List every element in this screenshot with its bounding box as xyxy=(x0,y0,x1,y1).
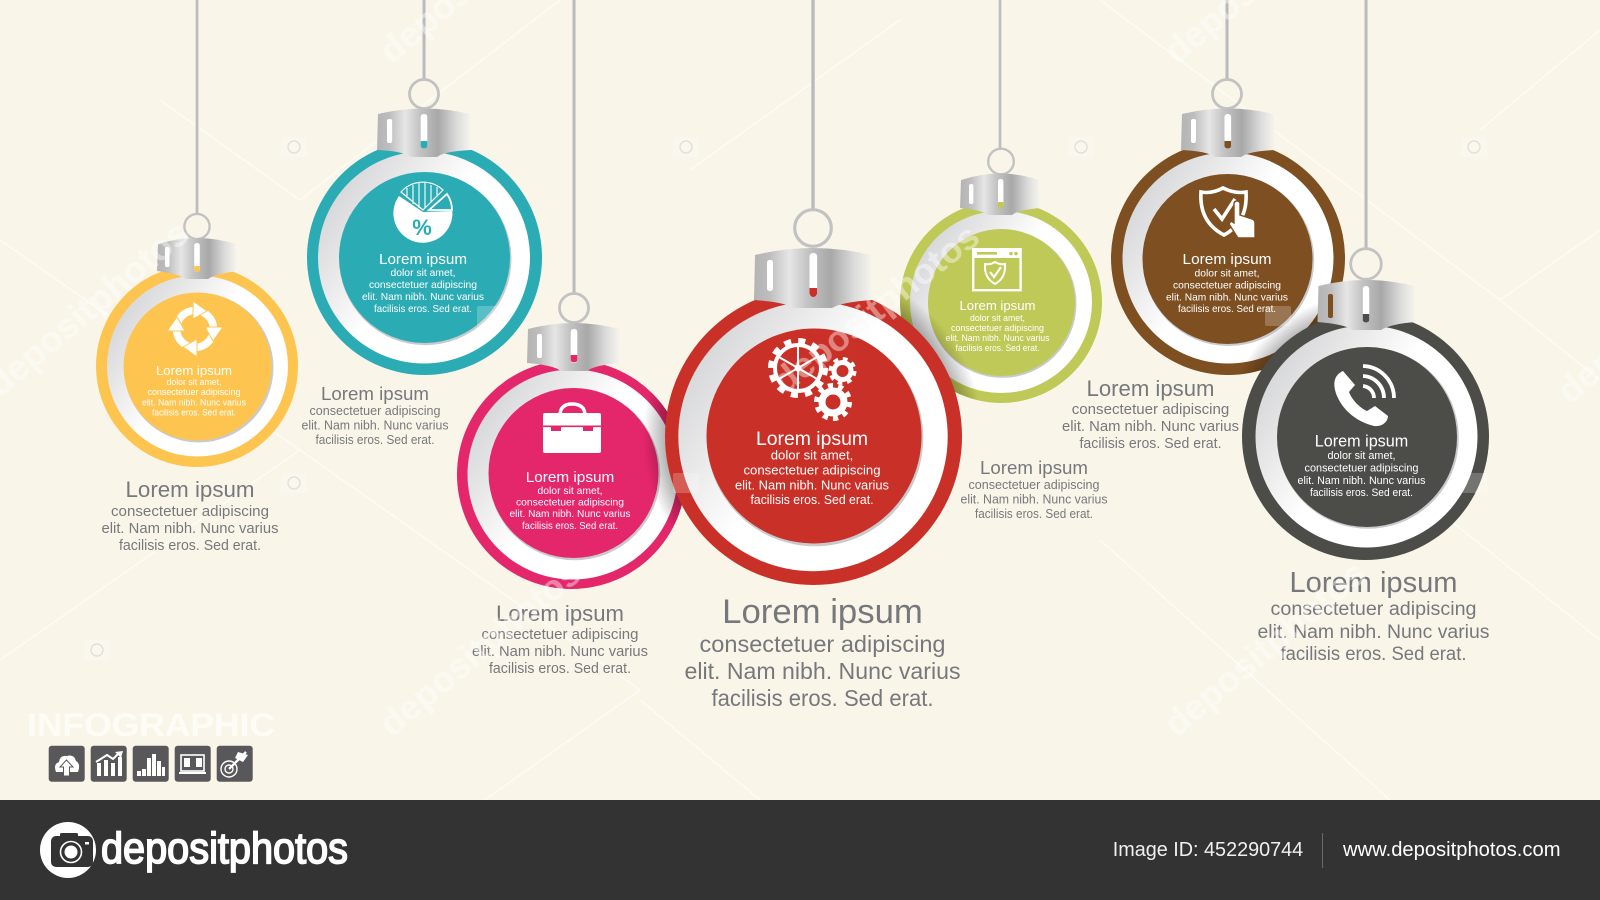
icon: cloud upload xyxy=(49,746,85,782)
caption: pink: facilisis eros. Sed erat. xyxy=(489,660,631,677)
caption: brown: elit. Nam nibh. Nunc varius xyxy=(1062,418,1239,435)
caption: pink: elit. Nam nibh. Nunc varius xyxy=(472,643,648,660)
text: dark inner label: Lorem ipsum xyxy=(1315,432,1408,450)
caption: yellow: Lorem ipsum xyxy=(126,477,254,502)
text: teal inner label xyxy=(362,251,484,315)
text: pink inner label xyxy=(510,469,630,532)
caption: brown: Lorem ipsum xyxy=(1086,376,1214,401)
caption: yellow: facilisis eros. Sed erat. xyxy=(119,537,261,554)
caption: red: consectetuer adipiscing xyxy=(700,631,946,657)
text: dark inner label xyxy=(1298,432,1426,499)
caption: brown: facilisis eros. Sed erat. xyxy=(1080,435,1222,452)
text: dark inner label: facilisis eros. Sed erat. xyxy=(1310,487,1413,499)
icon: gears xyxy=(771,341,854,418)
caption: red: facilisis eros. Sed erat. xyxy=(712,685,934,711)
icon: pie chart with percent xyxy=(393,182,452,243)
caption: pink: Lorem ipsum xyxy=(496,601,624,626)
icon: laptop xyxy=(175,746,211,782)
text: red inner label: facilisis eros. Sed erat. xyxy=(750,492,874,507)
caption: teal: elit. Nam nibh. Nunc varius xyxy=(302,418,448,432)
caption: dark grey xyxy=(1258,567,1490,665)
caption: green: Lorem ipsum xyxy=(980,457,1088,478)
text: green inner label: facilisis eros. Sed erat. xyxy=(956,343,1040,353)
caption: green: consectetuer adipiscing xyxy=(968,478,1100,492)
caption: dark grey: Lorem ipsum xyxy=(1290,567,1458,599)
icon: target with arrow xyxy=(217,746,253,782)
icon: growth chart xyxy=(91,746,127,782)
heading: INFOGRAPHIC: INFOGRAPHIC xyxy=(27,707,275,743)
caption: green: elit. Nam nibh. Nunc varius xyxy=(960,492,1108,506)
caption: teal: consectetuer adipiscing xyxy=(310,404,440,418)
icon: camera logo xyxy=(40,822,96,878)
text: teal inner label: Lorem ipsum xyxy=(379,251,467,268)
text: teal inner label: elit. Nam nibh. Nunc varius xyxy=(362,292,484,303)
caption: yellow: consectetuer adipiscing xyxy=(111,503,269,520)
text: brown inner label: Lorem ipsum xyxy=(1182,251,1272,268)
text: brown inner label: elit. Nam nibh. Nunc varius xyxy=(1166,292,1288,304)
caption: pink xyxy=(472,601,648,677)
icon: toolbox xyxy=(543,404,601,453)
text: red inner label: Lorem ipsum xyxy=(756,428,868,450)
text: pink inner label: dolor sit amet, xyxy=(538,486,602,497)
text: red inner label: consectetuer adipiscing xyxy=(744,462,880,478)
text: dark inner label: consectetuer adipiscing xyxy=(1304,462,1418,474)
text: teal inner label: facilisis eros. Sed erat. xyxy=(374,304,472,315)
text: yellow inner label: dolor sit amet, xyxy=(166,377,222,387)
text: yellow inner label: elit. Nam nibh. Nunc varius xyxy=(142,398,247,408)
text: green inner label: Lorem ipsum xyxy=(960,298,1036,313)
icon row xyxy=(49,746,253,782)
logo wordmark: depositphotos xyxy=(101,824,348,873)
text: brown inner label: facilisis eros. Sed erat. xyxy=(1178,304,1276,315)
caption: yellow xyxy=(102,477,278,554)
text: teal inner label: dolor sit amet, xyxy=(390,268,456,279)
website: www.depositphotos.com xyxy=(1342,839,1560,861)
caption: teal xyxy=(302,383,448,447)
icon: browser window with shield xyxy=(973,249,1021,290)
icon: circular arrows xyxy=(167,301,223,357)
caption: dark grey: consectetuer adipiscing xyxy=(1270,598,1476,620)
caption: dark grey: facilisis eros. Sed erat. xyxy=(1280,643,1466,665)
icon: telephone with signal xyxy=(1334,366,1394,426)
text: brown inner label: consectetuer adipiscing xyxy=(1173,280,1281,292)
text: yellow inner label: facilisis eros. Sed erat. xyxy=(152,408,236,418)
caption: green: facilisis eros. Sed erat. xyxy=(975,507,1093,521)
text: yellow inner label xyxy=(142,363,247,418)
caption: brown: consectetuer adipiscing xyxy=(1072,401,1229,418)
ornament: pink xyxy=(457,0,682,589)
text: yellow inner label: Lorem ipsum xyxy=(156,363,232,378)
ornament: brown xyxy=(1111,0,1345,375)
caption: green xyxy=(960,457,1108,521)
icon: bar chart xyxy=(133,746,169,782)
ornament: green xyxy=(900,0,1102,403)
caption: teal: facilisis eros. Sed erat. xyxy=(316,433,434,447)
caption: yellow: elit. Nam nibh. Nunc varius xyxy=(102,520,278,537)
ornament: dark grey xyxy=(1242,0,1489,560)
caption: red xyxy=(684,593,960,711)
text: green inner label: dolor sit amet, xyxy=(970,313,1025,323)
caption: dark grey: elit. Nam nibh. Nunc varius xyxy=(1258,621,1490,643)
text: brown inner label xyxy=(1166,251,1288,315)
text: pink inner label: Lorem ipsum xyxy=(526,469,614,486)
caption: red: Lorem ipsum xyxy=(722,593,923,631)
caption: brown xyxy=(1062,376,1239,452)
text: dark inner label: elit. Nam nibh. Nunc varius xyxy=(1298,475,1426,487)
caption: teal: Lorem ipsum xyxy=(321,383,429,404)
text: teal inner label: consectetuer adipiscing xyxy=(369,280,477,291)
watermark: depositphotos xyxy=(1156,552,1374,744)
text: dark inner label: dolor sit amet, xyxy=(1328,450,1396,462)
text: pink inner label: elit. Nam nibh. Nunc varius xyxy=(510,509,630,520)
ornament: teal xyxy=(307,0,542,375)
watermark: depositphotos xyxy=(765,215,987,401)
text: green inner label xyxy=(946,298,1050,353)
watermark: depositphotos xyxy=(371,552,589,744)
text: red inner label: elit. Nam nibh. Nunc varius xyxy=(735,478,889,492)
ornament: yellow xyxy=(96,0,298,467)
text: pink inner label: facilisis eros. Sed erat. xyxy=(522,521,618,532)
text: brown inner label: dolor sit amet, xyxy=(1194,268,1260,280)
icon: shield with hand xyxy=(1201,188,1255,238)
footer bar xyxy=(0,800,1600,900)
caption: pink: consectetuer adipiscing xyxy=(482,626,638,643)
text: red inner label: dolor sit amet, xyxy=(771,448,853,462)
text: yellow inner label: consectetuer adipiscing xyxy=(148,387,241,397)
text: green inner label: elit. Nam nibh. Nunc varius xyxy=(946,333,1050,343)
ornament: red xyxy=(665,0,962,585)
text: green inner label: consectetuer adipiscing xyxy=(951,323,1044,333)
text: pink inner label: consectetuer adipiscing xyxy=(516,498,624,508)
image id: Image ID: 452290744 xyxy=(1113,839,1303,861)
text: red inner label xyxy=(735,428,889,507)
icon: pie chart with percent: % xyxy=(412,215,432,240)
caption: red: elit. Nam nibh. Nunc varius xyxy=(684,658,960,684)
